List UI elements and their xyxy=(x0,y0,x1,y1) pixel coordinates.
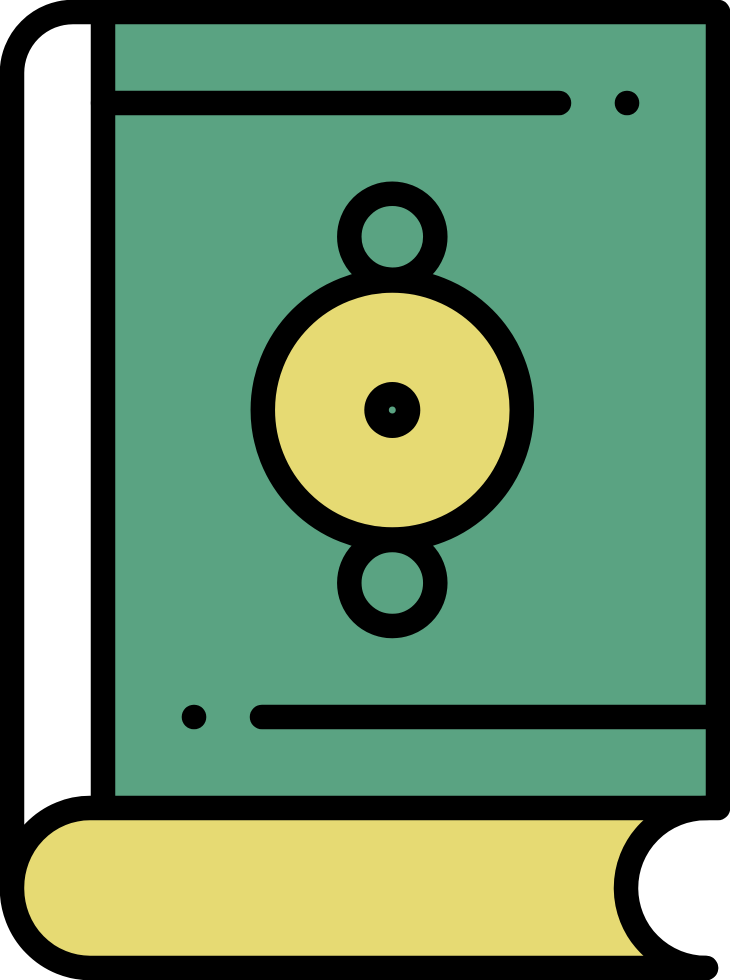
panel: yellow book pages xyxy=(12,809,706,968)
icon: central cover ornament xyxy=(263,194,522,626)
outline: page notch curve xyxy=(626,808,706,968)
decorative line: top cover rule xyxy=(103,91,559,115)
ornament: top small ring xyxy=(349,194,435,280)
ornament: centre green pinpoint xyxy=(389,406,396,414)
ornament: large yellow disc xyxy=(263,280,522,540)
ornament: bottom small ring xyxy=(349,540,435,626)
icon: top right cover dot xyxy=(615,91,639,115)
decorative line: bottom cover rule xyxy=(262,705,718,729)
panel: green book cover xyxy=(103,12,718,808)
icon: bottom left cover dot xyxy=(182,705,206,729)
outline: inner spine line xyxy=(91,12,115,808)
ornament: centre black dot xyxy=(364,382,420,438)
